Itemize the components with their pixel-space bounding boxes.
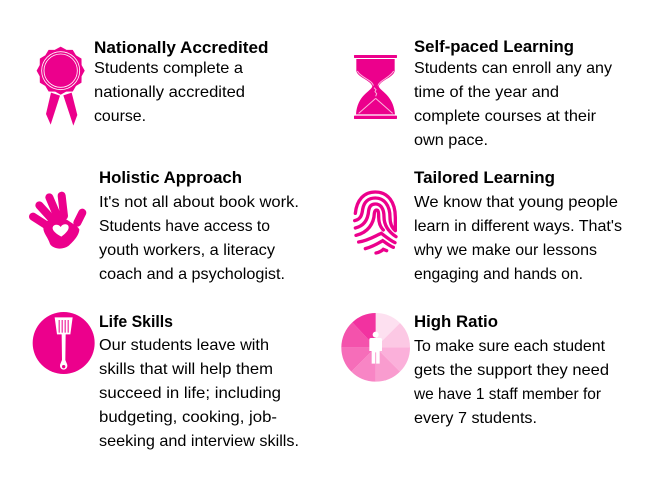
text block: self-paced learning: [414, 60, 612, 149]
text block: nationally accredited: Students complete a: [94, 60, 243, 77]
text block: tailored learning: learn in different ways. That's: [414, 218, 622, 235]
text block: life skills: seeking and interview skills.: [99, 433, 299, 450]
icon: person on pie wheel: [341, 313, 410, 382]
text block: self-paced learning: complete courses at their: [414, 108, 597, 125]
text block: life skills: succeed in life; including: [99, 385, 281, 402]
panel: self-paced learning: [354, 37, 612, 149]
text block: self-paced learning: time of the year and: [414, 84, 559, 101]
text block: holistic approach: [99, 194, 299, 283]
text block: high ratio: [413, 338, 609, 427]
heading: holistic approach: Holistic Approach: [99, 168, 242, 187]
panel: high ratio: [341, 312, 609, 427]
text block: holistic approach: It's not all about book work.: [99, 194, 299, 211]
panel: nationally accredited: [37, 38, 269, 126]
icon: award ribbon: [37, 47, 84, 126]
heading: tailored learning: Tailored Learning: [414, 168, 555, 187]
text block: nationally accredited: nationally accredited: [94, 84, 245, 101]
text block: high ratio: every 7 students.: [414, 410, 537, 427]
text block: holistic approach: Students have access to: [99, 218, 270, 235]
text block: nationally accredited: course.: [94, 108, 146, 125]
text block: high ratio: we have 1 staff member for: [413, 386, 602, 403]
text block: tailored learning: [413, 194, 622, 283]
text block: life skills: [99, 337, 299, 450]
heading: life skills: Life Skills: [99, 312, 173, 331]
text block: life skills: skills that will help them: [99, 361, 273, 378]
icon: hand with heart: [33, 196, 82, 249]
text block: self-paced learning: Students can enroll any any: [414, 60, 612, 77]
text block: holistic approach: coach and a psychologist.: [99, 266, 285, 283]
text block: tailored learning: engaging and hands on.: [414, 266, 583, 283]
panel: holistic approach: [33, 168, 299, 283]
text block: nationally accredited: [94, 60, 245, 125]
heading: high ratio: High Ratio: [414, 312, 498, 331]
heading: self-paced learning: Self-paced Learning: [414, 37, 574, 56]
text block: life skills: Our students leave with: [99, 337, 269, 354]
text block: holistic approach: youth workers, a literacy: [99, 242, 275, 259]
panel: life skills: [33, 312, 299, 450]
icon: spatula in circle: [33, 312, 95, 374]
icon: hourglass: [354, 55, 397, 119]
text block: tailored learning: why we make our lessons: [413, 242, 597, 259]
icon: fingerprint: [355, 192, 396, 253]
text block: tailored learning: We know that young people: [414, 194, 618, 211]
text block: life skills: budgeting, cooking, job-: [99, 409, 277, 426]
panel: tailored learning: [355, 168, 622, 283]
text block: self-paced learning: own pace.: [414, 132, 488, 149]
text block: high ratio: To make sure each student: [414, 338, 606, 355]
text block: high ratio: gets the support they need: [414, 362, 609, 379]
heading: nationally accredited: Nationally Accredited: [94, 38, 268, 57]
